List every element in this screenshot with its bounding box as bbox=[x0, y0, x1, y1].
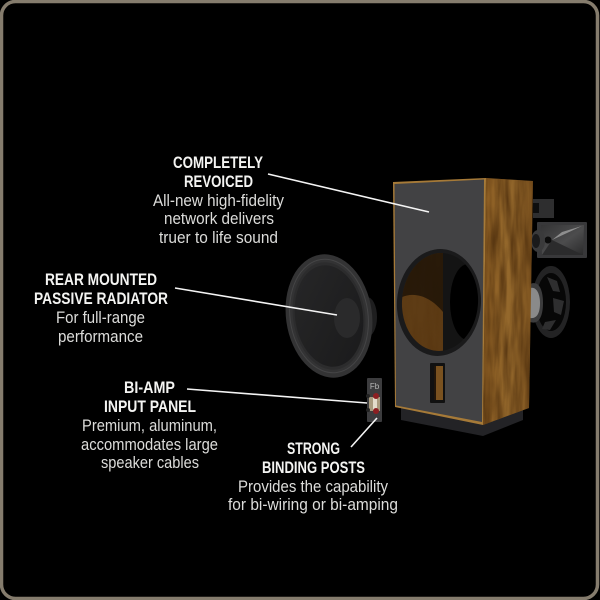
rear port bbox=[430, 363, 445, 403]
callout text: passive radiator bbox=[34, 270, 168, 346]
callout text: completely revoiced: network delivers bbox=[164, 209, 274, 228]
cabinet front trim bbox=[393, 178, 486, 425]
callout text: completely revoiced: truer to life sound bbox=[159, 228, 278, 247]
callout text: bi-amp input panel: INPUT PANEL bbox=[104, 397, 196, 416]
callout text: binding posts bbox=[228, 439, 398, 514]
callout text: bi-amp input panel: accommodates large bbox=[81, 435, 218, 454]
callout text: binding posts: Provides the capability bbox=[238, 477, 388, 496]
cabinet wood side bbox=[483, 178, 533, 425]
cabinet base bbox=[401, 406, 523, 436]
callout text: completely revoiced: COMPLETELY bbox=[173, 153, 264, 172]
callout text: completely revoiced bbox=[153, 153, 284, 247]
passive radiator bbox=[278, 249, 380, 383]
callout text: binding posts: BINDING POSTS bbox=[262, 458, 365, 477]
callout text: passive radiator: PASSIVE RADIATOR bbox=[34, 289, 168, 308]
callout lines bbox=[175, 174, 429, 447]
grille panel bbox=[394, 180, 484, 422]
callout text: bi-amp input panel bbox=[81, 378, 218, 472]
callout text: passive radiator: REAR MOUNTED bbox=[45, 270, 157, 289]
icon: woofer driver bbox=[530, 266, 570, 338]
callout text: bi-amp input panel: Premium, aluminum, bbox=[82, 416, 217, 435]
radiator opening bbox=[396, 249, 481, 356]
callout text: passive radiator: For full-range bbox=[56, 308, 145, 327]
input panel: Fb bbox=[370, 382, 380, 391]
callout text: completely revoiced: REVOICED bbox=[184, 172, 253, 191]
speaker cabinet bbox=[393, 178, 533, 436]
callout text: bi-amp input panel: speaker cables bbox=[101, 453, 199, 472]
callout text: passive radiator: performance bbox=[58, 327, 143, 346]
callout text: binding posts: STRONG bbox=[287, 439, 340, 458]
icon: tweeter module bbox=[531, 199, 587, 258]
callout text: binding posts: for bi-wiring or bi-amping bbox=[228, 495, 398, 514]
input panel bbox=[366, 378, 382, 422]
callout text: completely revoiced: All-new high-fidelity bbox=[153, 191, 284, 210]
callout text: bi-amp input panel: BI-AMP bbox=[124, 378, 175, 397]
